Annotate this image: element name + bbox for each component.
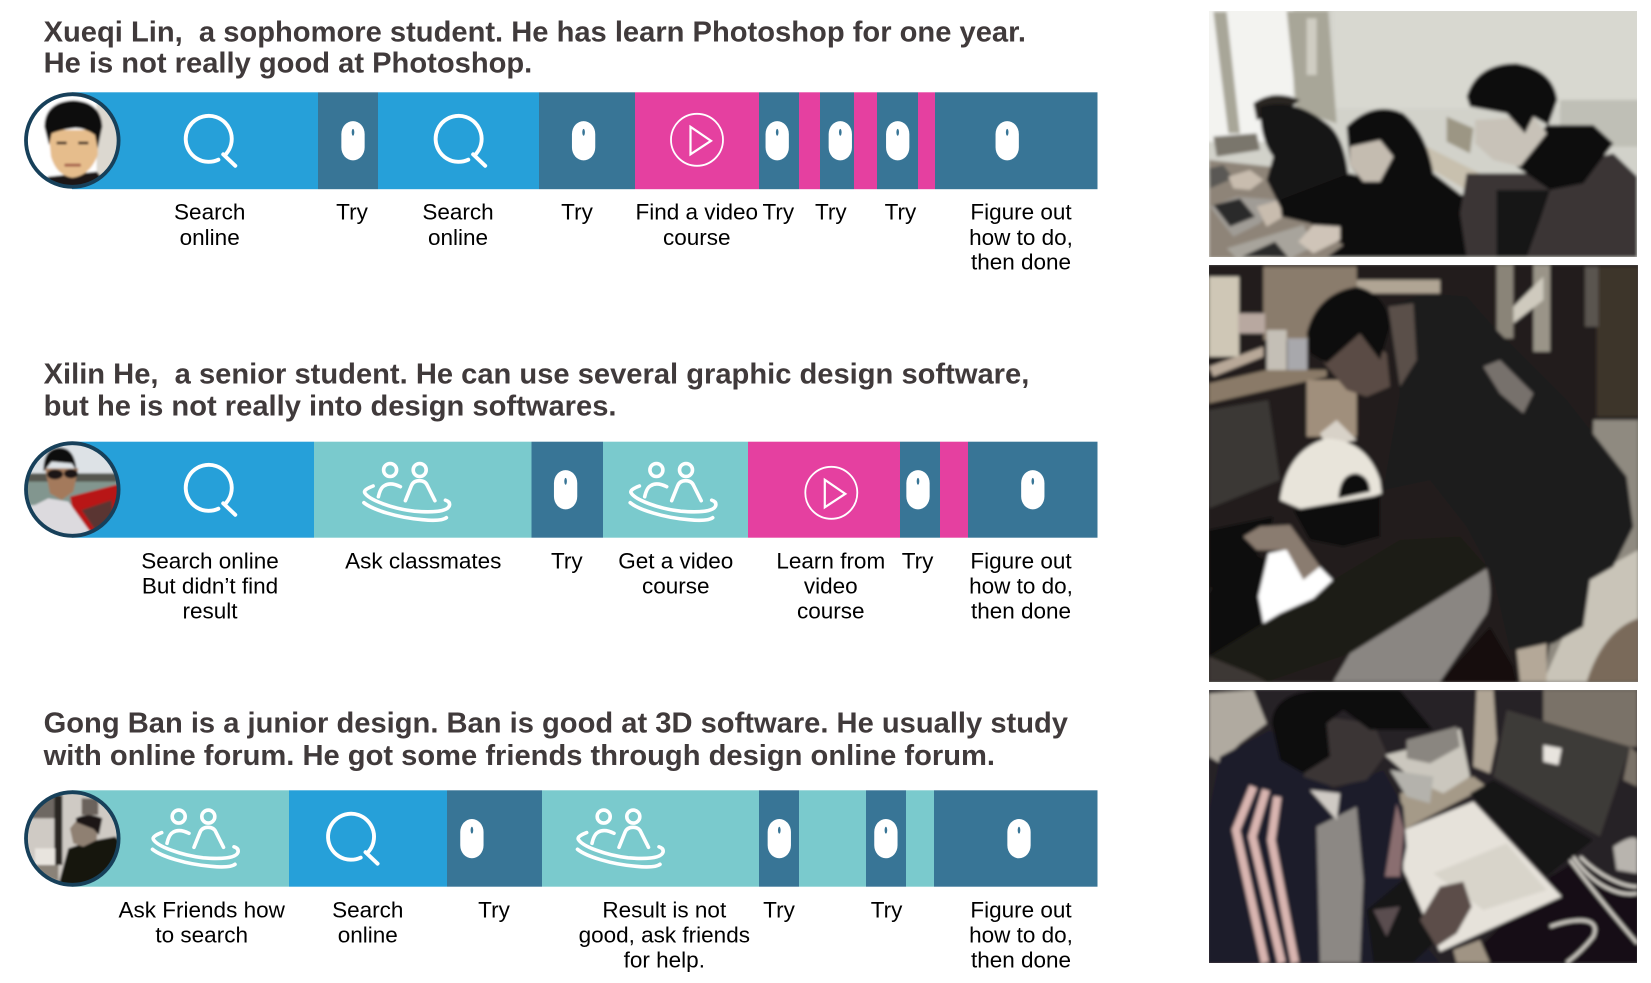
- step labels: Gong Ban: [119, 898, 1073, 972]
- heading: Xueqi Lin: He is not really good at Photoshop.: [44, 48, 532, 80]
- step labels: Xueqi Lin: Try: [561, 200, 594, 225]
- icon: people at table: [578, 810, 663, 867]
- step labels: Xueqi Lin: then done: [971, 250, 1071, 274]
- step labels: Xueqi Lin: [174, 200, 1073, 274]
- photo: student taking notes in front of laptop: [1207, 688, 1640, 965]
- step labels: Gong Ban: online: [338, 923, 398, 948]
- photo: student helping classmate at computer: [1207, 263, 1640, 683]
- step labels: Xueqi Lin: Try: [815, 200, 847, 225]
- step labels: Xueqi Lin: online: [180, 225, 240, 250]
- avatar: Xilin He: [22, 442, 122, 542]
- step labels: Gong Ban: Figure out: [970, 898, 1072, 923]
- icon: mouse: [460, 819, 484, 858]
- step labels: Xueqi Lin: Try: [336, 200, 369, 225]
- step labels: Gong Ban: for help.: [624, 947, 705, 972]
- avatar: Xueqi Lin: [22, 92, 122, 192]
- step labels: Xueqi Lin: Try: [762, 200, 795, 225]
- icon: mouse: [906, 470, 930, 509]
- step labels: Xueqi Lin: online: [428, 225, 488, 250]
- icon: search: [186, 465, 235, 515]
- step labels: Xueqi Lin: Figure out: [970, 200, 1072, 225]
- process bar: Xilin He: [72, 442, 1098, 538]
- icon: mouse: [1007, 819, 1031, 858]
- step labels: Xueqi Lin: how to do,: [969, 225, 1073, 250]
- step labels: Xueqi Lin: Search: [174, 200, 245, 225]
- icon: search: [436, 116, 485, 166]
- icon: mouse: [1021, 470, 1044, 509]
- step labels: Xilin He: result: [182, 598, 238, 623]
- step labels: Xilin He: Get a video: [618, 549, 733, 574]
- step labels: Xilin He: [141, 549, 1073, 623]
- icon: mouse: [996, 121, 1019, 160]
- icon: search: [186, 116, 235, 166]
- icon: search: [328, 814, 378, 864]
- step labels: Xilin He: Try: [551, 549, 583, 574]
- icon: mouse: [768, 819, 791, 858]
- step labels: Gong Ban: Result is not: [602, 898, 727, 923]
- step labels: Xilin He: Learn from: [776, 549, 885, 574]
- step labels: Xilin He: Ask classmates: [345, 549, 501, 574]
- icon: mouse: [874, 819, 898, 858]
- icon: play video: [805, 467, 857, 519]
- heading: Xueqi Lin: Xueqi Lin, a sophomore student. He has learn Photoshop for one year.: [44, 17, 1026, 49]
- heading: Gong Ban: Gong Ban is a junior design. Ban is good at 3D software. He usually study: [44, 707, 1069, 739]
- step labels: Xilin He: Figure out: [970, 549, 1072, 574]
- icon: mouse: [572, 121, 595, 160]
- step labels: Xilin He: Try: [902, 549, 934, 574]
- step labels: Gong Ban: Try: [763, 898, 796, 923]
- heading: Xilin He: Xilin He, a senior student. He can use several graphic design software,: [44, 358, 1029, 390]
- step labels: Xilin He: then done: [971, 598, 1071, 623]
- step labels: Xueqi Lin: Try: [885, 200, 917, 225]
- step labels: Xilin He: course: [797, 598, 865, 623]
- step labels: Xueqi Lin: course: [663, 225, 731, 250]
- step labels: Xilin He: course: [642, 574, 710, 599]
- icon: people at table: [364, 464, 450, 520]
- step labels: Gong Ban: Try: [871, 898, 903, 923]
- step labels: Gong Ban: Try: [478, 898, 511, 923]
- icon: mouse: [829, 121, 852, 160]
- heading: Gong Ban: with online forum. He got some friends through design online forum.: [43, 740, 995, 772]
- heading: Xilin He: but he is not really into design softwares.: [44, 390, 616, 422]
- step labels: Gong Ban: Ask Friends how: [119, 898, 286, 923]
- icon: people at table: [152, 810, 238, 867]
- icon: people at table: [630, 464, 716, 520]
- step labels: Xilin He: Search online: [141, 549, 279, 574]
- step labels: Xilin He: But didn’t find: [142, 574, 278, 599]
- process bar: Gong Ban: [72, 790, 1098, 887]
- icon: mouse: [766, 121, 789, 160]
- step labels: Xilin He: how to do,: [969, 574, 1073, 599]
- step labels: Gong Ban: then done: [971, 947, 1071, 972]
- icon: mouse: [341, 121, 365, 160]
- photo: students at laptops: [1207, 8, 1640, 260]
- step labels: Gong Ban: Search: [332, 898, 403, 923]
- step labels: Gong Ban: how to do,: [969, 923, 1073, 948]
- process bar: Xueqi Lin: [72, 92, 1098, 189]
- icon: mouse: [886, 121, 909, 160]
- avatar: Gong Ban: [22, 788, 122, 892]
- icon: play video: [671, 114, 723, 166]
- step labels: Xilin He: video: [804, 574, 858, 599]
- step labels: Gong Ban: to search: [155, 923, 248, 948]
- icon: mouse: [554, 470, 577, 509]
- step labels: Xueqi Lin: Find a video: [636, 200, 758, 225]
- step labels: Gong Ban: good, ask friends: [579, 923, 750, 948]
- step labels: Xueqi Lin: Search: [422, 200, 494, 225]
